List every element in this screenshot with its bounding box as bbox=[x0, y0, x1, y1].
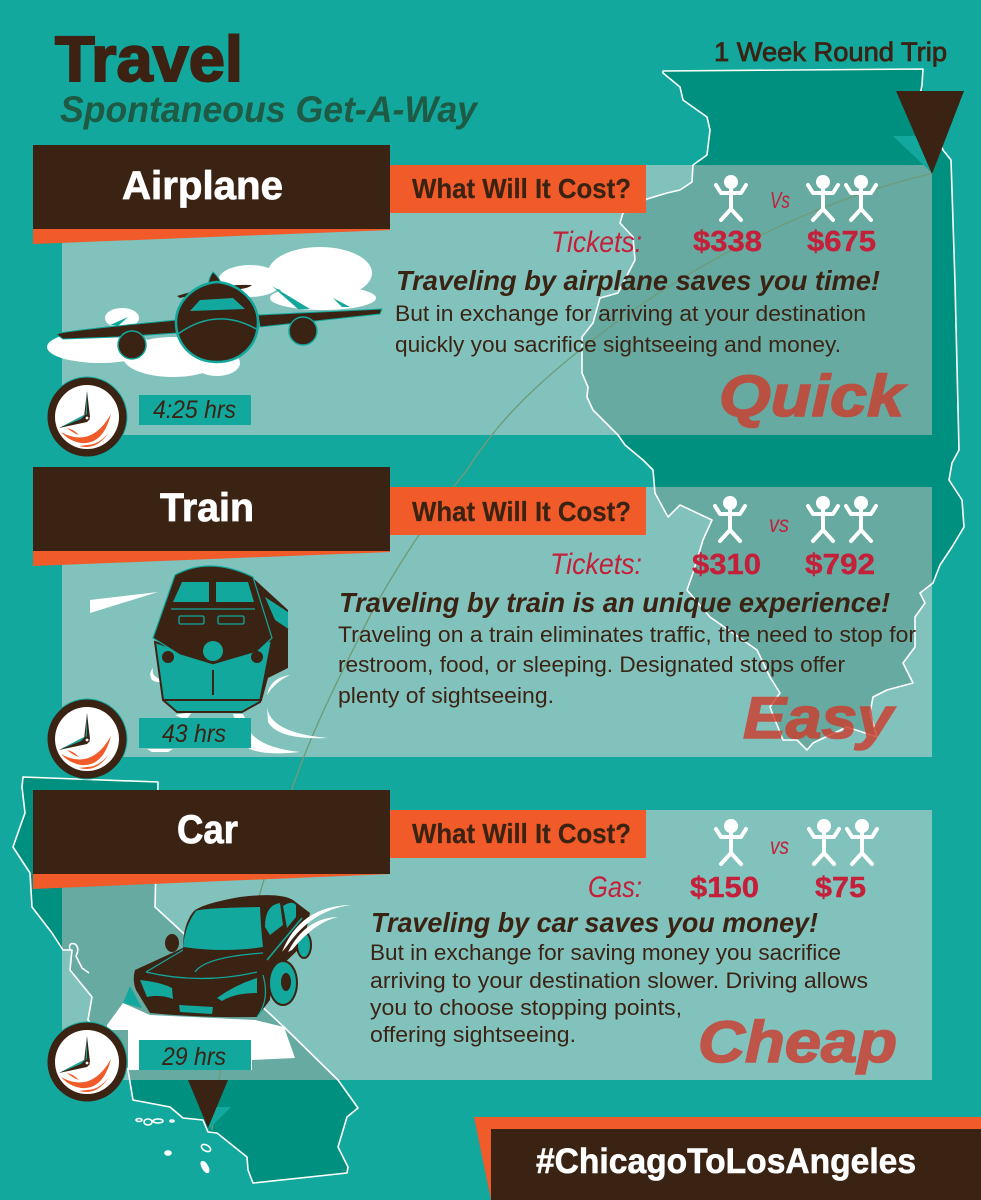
keyword: Easy: Easy bbox=[743, 686, 896, 751]
cost heading: What Will It Cost? bbox=[412, 496, 631, 527]
description: Traveling on a train eliminates traffic, the need to stop for bbox=[338, 622, 917, 647]
description: Traveling by car saves you money! bbox=[371, 907, 818, 938]
description: quickly you sacrifice sightseeing and money. bbox=[395, 332, 841, 357]
hashtag banner: #ChicagoToLosAngeles bbox=[536, 1142, 916, 1181]
content panel backgrounds bbox=[62, 165, 932, 1080]
ticket prices: $310 bbox=[692, 549, 761, 581]
header: Train: Train bbox=[160, 486, 254, 530]
cost heading bbox=[390, 487, 646, 535]
ticket prices: $338 bbox=[693, 226, 762, 258]
description: Traveling by airplane saves you time! bbox=[396, 265, 880, 296]
people comparison bbox=[716, 819, 877, 864]
description bbox=[338, 587, 917, 708]
gas prices: Gas: bbox=[588, 871, 642, 904]
car illustration bbox=[123, 895, 351, 1017]
marker: Chicago bbox=[893, 91, 964, 174]
gas prices bbox=[588, 871, 866, 904]
route arc from Chicago to Los Angeles bbox=[212, 173, 933, 1130]
ticket prices: Tickets: bbox=[551, 226, 642, 259]
header: Airplane bbox=[33, 145, 390, 244]
marker: Los Angeles bbox=[188, 1080, 231, 1130]
clock icon bbox=[46, 376, 128, 458]
description: arriving to your destination slower. Driving allows bbox=[370, 968, 868, 993]
airplane illustration bbox=[47, 247, 382, 377]
section: train bbox=[33, 467, 917, 780]
ticket prices bbox=[550, 548, 875, 581]
ticket prices: $675 bbox=[807, 226, 876, 258]
clock icon bbox=[46, 1022, 128, 1102]
keyword: Quick: Quick bbox=[719, 364, 907, 429]
gas prices: $75 bbox=[815, 872, 866, 904]
description: plenty of sightseeing. bbox=[338, 683, 554, 708]
people comparison: vs bbox=[770, 833, 789, 859]
description: But in exchange for saving money you sacrifice bbox=[370, 940, 841, 965]
header: Car bbox=[33, 790, 390, 889]
title: Travel bbox=[55, 23, 243, 95]
gas prices: $150 bbox=[690, 872, 759, 904]
duration label: 4:25 hrs bbox=[153, 396, 236, 424]
section: car bbox=[33, 790, 897, 1102]
keyword: Cheap: Cheap bbox=[698, 1010, 897, 1075]
description: restroom, food, or sleeping. Designated stops offer bbox=[338, 652, 846, 677]
cost heading: What Will It Cost? bbox=[412, 818, 631, 849]
people comparison bbox=[716, 175, 876, 220]
duration label bbox=[139, 718, 251, 748]
hashtag banner bbox=[474, 1117, 981, 1200]
duration label: 29 hrs bbox=[161, 1043, 226, 1071]
map tint inside panels bbox=[62, 165, 932, 1080]
description bbox=[370, 907, 868, 1047]
cost heading bbox=[390, 810, 646, 858]
description: Traveling by train is an unique experience! bbox=[339, 587, 890, 618]
ticket prices: $792 bbox=[805, 549, 875, 581]
section: airplane bbox=[33, 145, 907, 458]
header: Train bbox=[33, 467, 390, 566]
ticket prices: Tickets: bbox=[550, 548, 642, 581]
road bbox=[107, 1003, 295, 1070]
duration label bbox=[139, 1040, 251, 1071]
people comparison bbox=[715, 496, 876, 541]
description: offering sightseeing. bbox=[370, 1022, 576, 1047]
cost heading: What Will It Cost? bbox=[412, 173, 631, 204]
people comparison: vs bbox=[769, 511, 789, 537]
ticket prices bbox=[551, 226, 876, 259]
clock icon bbox=[46, 698, 128, 780]
duration label: 43 hrs bbox=[162, 720, 226, 748]
cost heading bbox=[390, 165, 646, 213]
train illustration bbox=[90, 566, 328, 753]
description: you to choose stopping points, bbox=[370, 995, 682, 1020]
description bbox=[395, 265, 880, 357]
trip length label: 1 Week Round Trip bbox=[714, 37, 947, 67]
header: Airplane: Airplane bbox=[122, 164, 283, 208]
people comparison: Vs bbox=[770, 187, 790, 213]
description: But in exchange for arriving at your destination bbox=[395, 301, 866, 326]
subtitle: Spontaneous Get-A-Way bbox=[60, 89, 479, 130]
header: Car: Car bbox=[177, 808, 238, 852]
